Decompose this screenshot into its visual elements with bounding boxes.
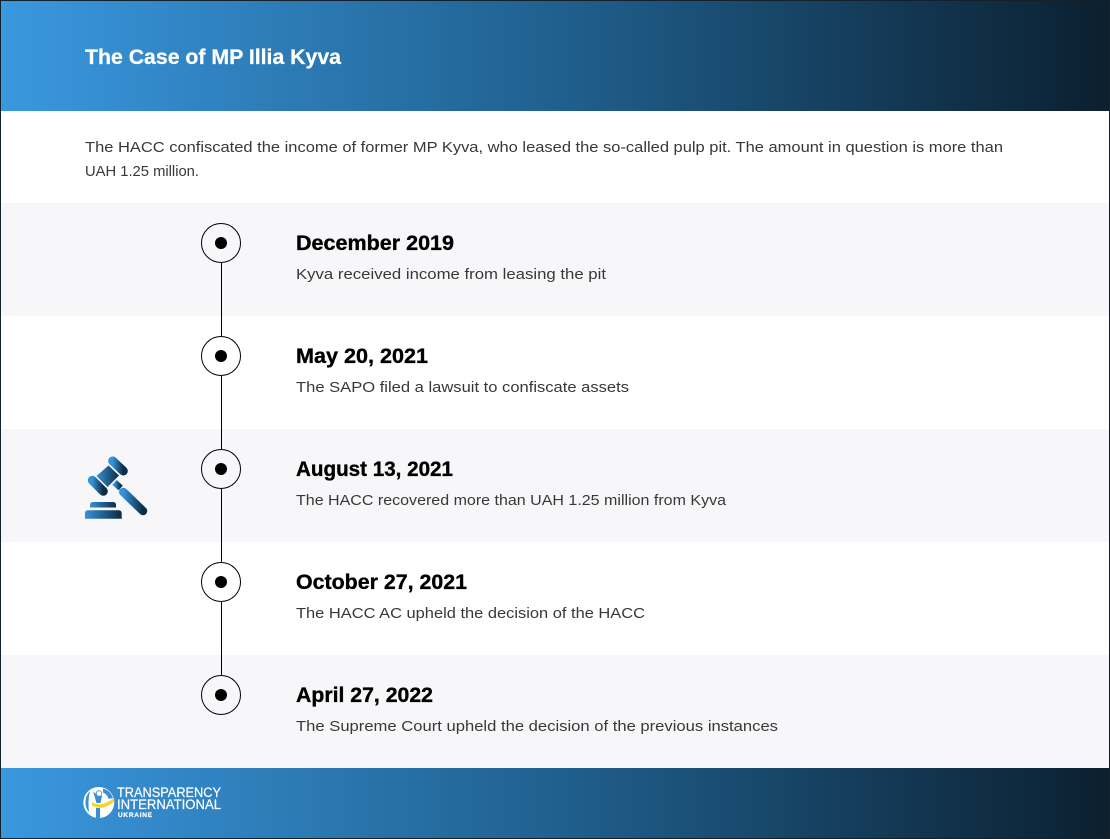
timeline line <box>220 262 222 676</box>
footer band <box>0 768 1110 839</box>
date: December 2019 <box>296 232 454 255</box>
marker <box>202 224 240 262</box>
description: The HACC recovered more than UAH 1.25 million from Kyva <box>296 492 727 509</box>
logo wordmark: UKRAINE <box>118 812 153 819</box>
description: The HACC AC upheld the decision of the HACC <box>296 605 645 622</box>
marker <box>202 336 240 376</box>
description: The SAPO filed a lawsuit to confiscate assets <box>296 379 629 396</box>
event: December 2019 <box>202 224 607 283</box>
logo: Transparency International Ukraine <box>83 785 221 819</box>
title: The Case of MP Illia Kyva <box>85 46 341 69</box>
description: The Supreme Court upheld the decision of the previous instances <box>296 718 778 735</box>
event: August 13, 2021 <box>202 450 727 509</box>
marker <box>202 450 240 488</box>
header band <box>0 0 1110 111</box>
marker <box>202 562 240 602</box>
marker <box>202 676 240 714</box>
intro text: The HACC confiscated the income of former MP Kyva, who leased the so-called pulp pit. The amount in question is more than <box>85 139 1003 156</box>
event: May 20, 2021 <box>202 336 629 396</box>
row backgrounds <box>0 203 1110 768</box>
icon: gavel <box>85 461 143 519</box>
date: August 13, 2021 <box>296 458 453 481</box>
intro text: UAH 1.25 million. <box>85 163 199 180</box>
description: Kyva received income from leasing the pit <box>296 266 607 283</box>
intro text <box>85 139 1003 180</box>
logo wordmark: TRANSPARENCY <box>117 785 221 800</box>
logo wordmark <box>117 785 221 819</box>
date: October 27, 2021 <box>296 571 467 594</box>
date: May 20, 2021 <box>296 345 428 368</box>
logo emblem <box>83 787 114 818</box>
date: April 27, 2022 <box>296 684 433 707</box>
event: October 27, 2021 <box>202 562 645 622</box>
event: April 27, 2022 <box>202 676 778 735</box>
logo wordmark: INTERNATIONAL <box>117 797 221 812</box>
